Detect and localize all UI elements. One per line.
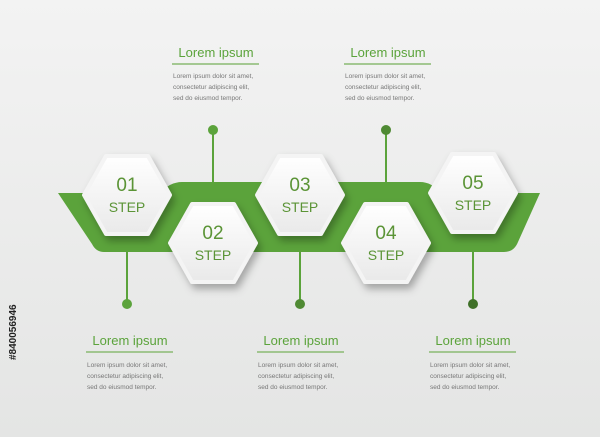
- connector: bottom 01: [122, 252, 132, 309]
- hexagon step 04: 04: [375, 223, 397, 244]
- text block top 04: Lorem ipsum dolor sit amet,: [345, 73, 425, 80]
- hexagon step 01: [84, 156, 170, 234]
- text block bottom 05: consectetur adipiscing elit,: [430, 373, 506, 380]
- text block top 04: Lorem ipsum: [350, 45, 426, 60]
- text block bottom 01: sed do eiusmod tempor.: [87, 384, 157, 391]
- text block top 02: [172, 45, 259, 102]
- text block bottom 05: [429, 333, 516, 391]
- text block bottom 05: Lorem ipsum dolor sit amet,: [430, 362, 510, 369]
- connector: top 02: [208, 125, 218, 182]
- text block top 04: [344, 45, 431, 102]
- text block bottom 01: consectetur adipiscing elit,: [87, 373, 163, 380]
- hexagon step 01: 01: [116, 175, 138, 196]
- text block top 02: Lorem ipsum dolor sit amet,: [173, 73, 253, 80]
- text block bottom 05: sed do eiusmod tempor.: [430, 384, 500, 391]
- text block bottom 01: Lorem ipsum dolor sit amet,: [87, 362, 167, 369]
- text block top 02: sed do eiusmod tempor.: [173, 95, 243, 102]
- text block bottom 03: Lorem ipsum dolor sit amet,: [258, 362, 338, 369]
- hexagon step 02: STEP: [195, 247, 231, 263]
- text block bottom 03: [257, 333, 344, 391]
- hexagon step 03: 03: [289, 175, 311, 196]
- hexagon step 02: [170, 204, 256, 282]
- hexagon step 03: [257, 156, 343, 234]
- hexagon step 04: [343, 204, 429, 282]
- hexagon step 04: STEP: [368, 247, 404, 263]
- text block bottom 01: Lorem ipsum: [92, 333, 168, 348]
- hexagon step 02: 02: [202, 223, 224, 244]
- text block bottom 01: [86, 333, 173, 391]
- connector: bottom 03: [295, 252, 305, 309]
- text block bottom 03: sed do eiusmod tempor.: [258, 384, 328, 391]
- hexagon step 03: STEP: [282, 199, 318, 215]
- hexagon step 05: STEP: [455, 197, 491, 213]
- text block top 04: consectetur adipiscing elit,: [345, 84, 421, 91]
- hexagon step 05: 05: [462, 173, 484, 194]
- side id text: #840056946: [8, 304, 19, 360]
- text block bottom 03: Lorem ipsum: [263, 333, 339, 348]
- text block top 02: Lorem ipsum: [178, 45, 254, 60]
- text block top 04: sed do eiusmod tempor.: [345, 95, 415, 102]
- hexagon step 05: [430, 154, 516, 232]
- connector: bottom 05: [468, 252, 478, 309]
- text block bottom 05: Lorem ipsum: [435, 333, 511, 348]
- green zigzag band: [58, 182, 540, 252]
- hexagon step 01: STEP: [109, 199, 145, 215]
- text block top 02: consectetur adipiscing elit,: [173, 84, 249, 91]
- text block bottom 03: consectetur adipiscing elit,: [258, 373, 334, 380]
- connector: top 04: [381, 125, 391, 182]
